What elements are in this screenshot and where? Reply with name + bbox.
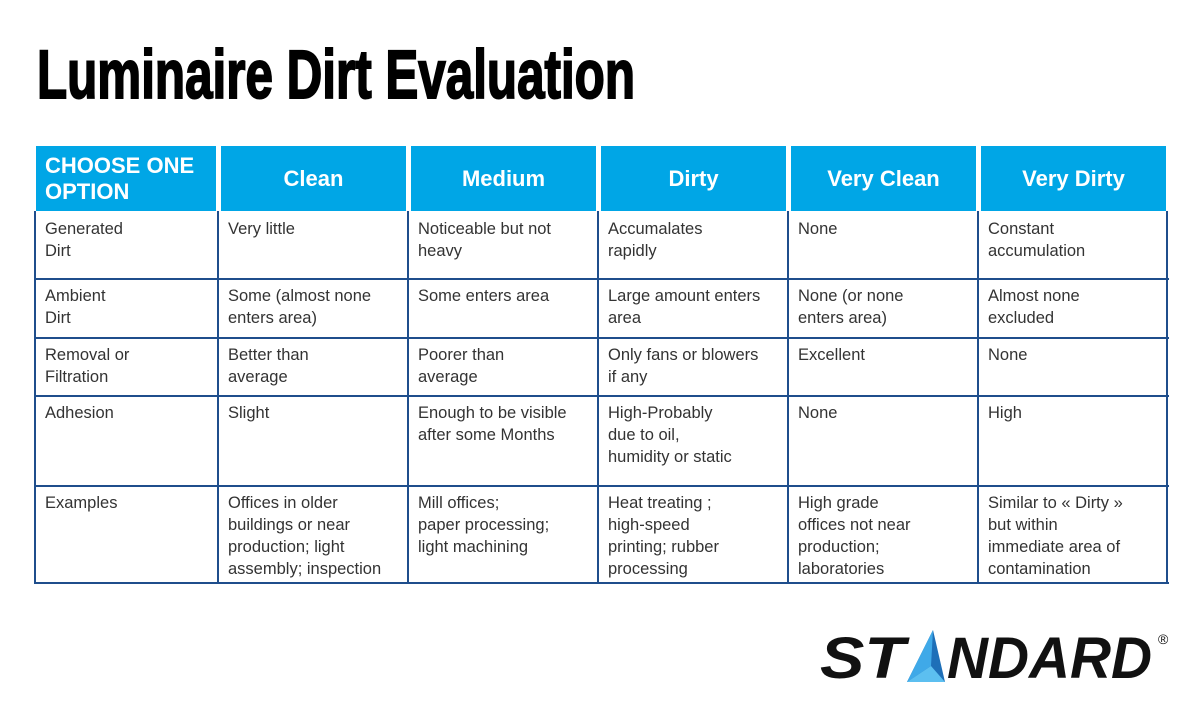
logo: STANDARD <box>820 626 1169 690</box>
table: after some Months <box>418 426 555 444</box>
table: assembly; inspection <box>228 560 381 578</box>
table: Almost none <box>988 287 1080 305</box>
table: Filtration <box>45 368 108 386</box>
table: buildings or near <box>228 516 350 534</box>
table: Some enters area <box>418 287 549 305</box>
table: humidity or static <box>608 448 732 466</box>
row: removal <box>45 346 1027 386</box>
row: adhesion <box>45 404 1022 466</box>
table: paper processing; <box>418 516 549 534</box>
table: Offices in older <box>228 494 338 512</box>
logo: STANDARD: ST <box>820 626 910 690</box>
table: Mill offices; <box>418 494 499 512</box>
table: immediate area of <box>988 538 1120 556</box>
logo: STANDARD: ® <box>1158 631 1169 647</box>
table: excluded <box>988 309 1054 327</box>
header row <box>36 146 1166 211</box>
table: rapidly <box>608 242 657 260</box>
table: None <box>798 404 837 422</box>
table: light machining <box>418 538 528 556</box>
table: OPTION <box>45 178 129 204</box>
table: CHOOSE ONE <box>45 152 194 178</box>
table: Slight <box>228 404 269 422</box>
table: Very little <box>228 220 295 238</box>
table: Heat treating ; <box>608 494 712 512</box>
table: Poorer than <box>418 346 504 364</box>
table: processing <box>608 560 688 578</box>
table: Ambient <box>45 287 106 305</box>
table: accumulation <box>988 242 1085 260</box>
row: ambient dirt <box>45 287 1080 327</box>
table: laboratories <box>798 560 884 578</box>
table: Dirty <box>668 166 719 190</box>
table: Medium <box>462 166 545 190</box>
table: Enough to be visible <box>418 404 567 422</box>
table: high-speed <box>608 516 690 534</box>
table: but within <box>988 516 1058 534</box>
table: area <box>608 309 641 327</box>
table: printing; rubber <box>608 538 719 556</box>
table: Only fans or blowers <box>608 346 758 364</box>
table: Similar to « Dirty » <box>988 494 1123 512</box>
table: High grade <box>798 494 879 512</box>
table: None <box>798 220 837 238</box>
table: Dirt <box>45 309 71 327</box>
table: None (or none <box>798 287 904 305</box>
table: enters area) <box>798 309 887 327</box>
table: Examples <box>45 494 117 512</box>
table: heavy <box>418 242 462 260</box>
table: if any <box>608 368 647 386</box>
table: Accumalates <box>608 220 702 238</box>
table: Better than <box>228 346 309 364</box>
table: Dirt <box>45 242 71 260</box>
table: Adhesion <box>45 404 114 422</box>
table: High <box>988 404 1022 422</box>
table: Removal or <box>45 346 129 364</box>
table: High-Probably <box>608 404 713 422</box>
table: None <box>988 346 1027 364</box>
table: Very Dirty <box>1022 166 1125 190</box>
table: Constant <box>988 220 1054 238</box>
table: due to oil, <box>608 426 680 444</box>
logo: STANDARD: NDARD <box>947 626 1152 690</box>
table: enters area) <box>228 309 317 327</box>
table: production; <box>798 538 880 556</box>
table: Some (almost none <box>228 287 371 305</box>
row: generated dirt <box>45 220 1085 260</box>
table: Clean <box>284 166 343 190</box>
table: average <box>228 368 288 386</box>
table: Excellent <box>798 346 865 364</box>
table: production; light <box>228 538 344 556</box>
table: Very Clean <box>827 166 940 190</box>
table: offices not near <box>798 516 911 534</box>
table: average <box>418 368 478 386</box>
table: contamination <box>988 560 1091 578</box>
row: examples <box>45 494 1123 578</box>
table: Noticeable but not <box>418 220 551 238</box>
icon: triangle <box>907 630 945 682</box>
table: Generated <box>45 220 123 238</box>
table: Large amount enters <box>608 287 760 305</box>
